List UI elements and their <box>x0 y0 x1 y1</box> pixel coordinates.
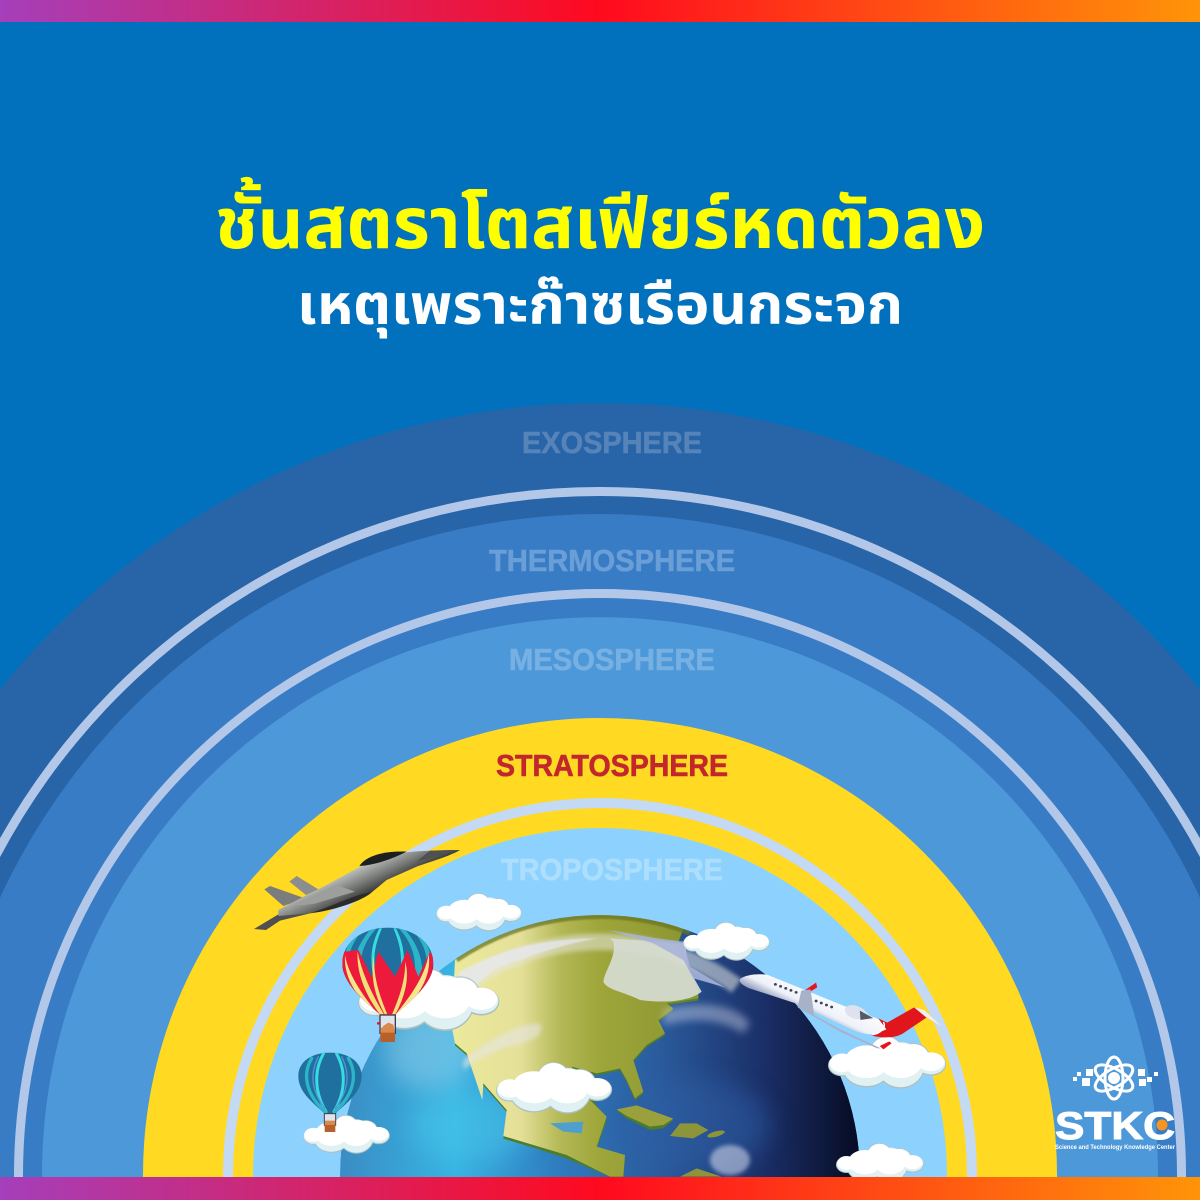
logo atom emblem <box>1091 1057 1137 1099</box>
balloon basket <box>325 1125 335 1132</box>
ring: thermosphere boundary <box>14 589 1186 1177</box>
jet tail fin far <box>289 876 318 895</box>
subtitle: เหตุเพราะก๊าซเรือนกระจก <box>297 273 903 339</box>
layer: mesosphere <box>42 617 1158 1177</box>
plane winglet <box>804 983 817 993</box>
land: north america <box>452 914 698 1177</box>
plane lower winglet <box>880 1041 892 1049</box>
jet nose <box>417 850 460 862</box>
haze: lower right puff <box>710 1145 750 1175</box>
label: thermosphere: THERMOSPHERE <box>489 543 735 578</box>
layer: troposphere <box>253 828 947 1177</box>
land: south america <box>680 1168 722 1177</box>
balloon flag <box>377 1022 380 1025</box>
haze: terminator <box>663 1005 750 1033</box>
balloon envelope <box>298 1053 362 1113</box>
fog: upper rim band <box>463 942 737 986</box>
small hot air balloon <box>298 1053 362 1132</box>
land: puerto rico <box>707 1130 725 1138</box>
water: inlet near mexico <box>550 1122 583 1133</box>
land shadow <box>455 916 698 1177</box>
logo tagline: Science and Technology Knowledge Center <box>1055 1144 1175 1151</box>
ring: stratosphere boundary <box>223 798 977 1177</box>
plane fuselage <box>740 974 887 1034</box>
logo: STKC <box>1055 1057 1175 1151</box>
jet fuselage <box>278 850 460 916</box>
balloon passengers <box>381 1023 395 1033</box>
plane engine <box>845 1005 873 1019</box>
land rim shade <box>457 917 690 960</box>
cloud: under plane <box>828 1036 946 1089</box>
plane red tail <box>872 1007 928 1037</box>
haze: cloud streak top <box>608 930 725 987</box>
cloud: over mexico <box>496 1062 612 1114</box>
passenger plane <box>740 974 941 1049</box>
balloon envelope <box>342 928 434 1014</box>
logo orange dot <box>1156 1120 1168 1130</box>
earth globe <box>340 914 860 1177</box>
haze: high arc <box>457 938 597 990</box>
land: cuba shadow <box>616 1110 674 1130</box>
large hot air balloon <box>340 925 437 1042</box>
jet fighter <box>254 850 460 930</box>
logo pixel dots <box>1073 1069 1158 1086</box>
jet lower stabilizer <box>254 913 310 930</box>
balloon basket frame <box>324 1114 336 1125</box>
jet engine <box>310 892 372 913</box>
balloon passengers <box>325 1121 335 1125</box>
plane wing <box>798 989 881 1048</box>
plane tail stripe <box>872 1022 884 1035</box>
top gradient bar <box>0 0 1200 22</box>
title: ชั้นสตราโตสเฟียร์หดตัวลง <box>215 177 985 264</box>
layer: thermosphere <box>0 514 1200 1177</box>
label: exosphere: EXOSPHERE <box>522 425 702 460</box>
balloon basket frame <box>380 1015 395 1033</box>
plane engine nozzle <box>860 1011 873 1020</box>
plane windows <box>774 983 833 1008</box>
plane horizontal stabilizer <box>914 1007 941 1026</box>
jet wing <box>292 885 355 906</box>
balloon stripes <box>307 1054 353 1112</box>
cloud: below small balloon <box>303 1115 390 1154</box>
jet canopy <box>359 852 407 866</box>
atmosphere layers <box>0 403 1200 1177</box>
balloon basket <box>380 1033 395 1042</box>
cloud: upper left <box>436 893 522 931</box>
label: mesosphere: MESOSPHERE <box>509 642 715 677</box>
cloud: upper right <box>683 922 770 961</box>
label: stratosphere: STRATOSPHERE <box>496 748 728 783</box>
land: cuba <box>617 1105 673 1127</box>
cloud: behind large balloon <box>358 968 499 1031</box>
ice: greenland pale cover <box>603 938 702 1002</box>
layer: stratosphere <box>143 718 1057 1177</box>
cloud: bottom right <box>836 1143 924 1182</box>
jet tail fin near <box>264 886 305 906</box>
layer: exosphere <box>0 403 1200 1177</box>
ring: exosphere boundary <box>0 487 1200 857</box>
logo wordmark: STKC <box>1055 1105 1175 1148</box>
bottom gradient bar <box>0 1177 1200 1200</box>
label: troposphere: TROPOSPHERE <box>501 852 723 887</box>
haze: white streak <box>463 1023 541 1070</box>
land: hispaniola <box>670 1123 708 1138</box>
